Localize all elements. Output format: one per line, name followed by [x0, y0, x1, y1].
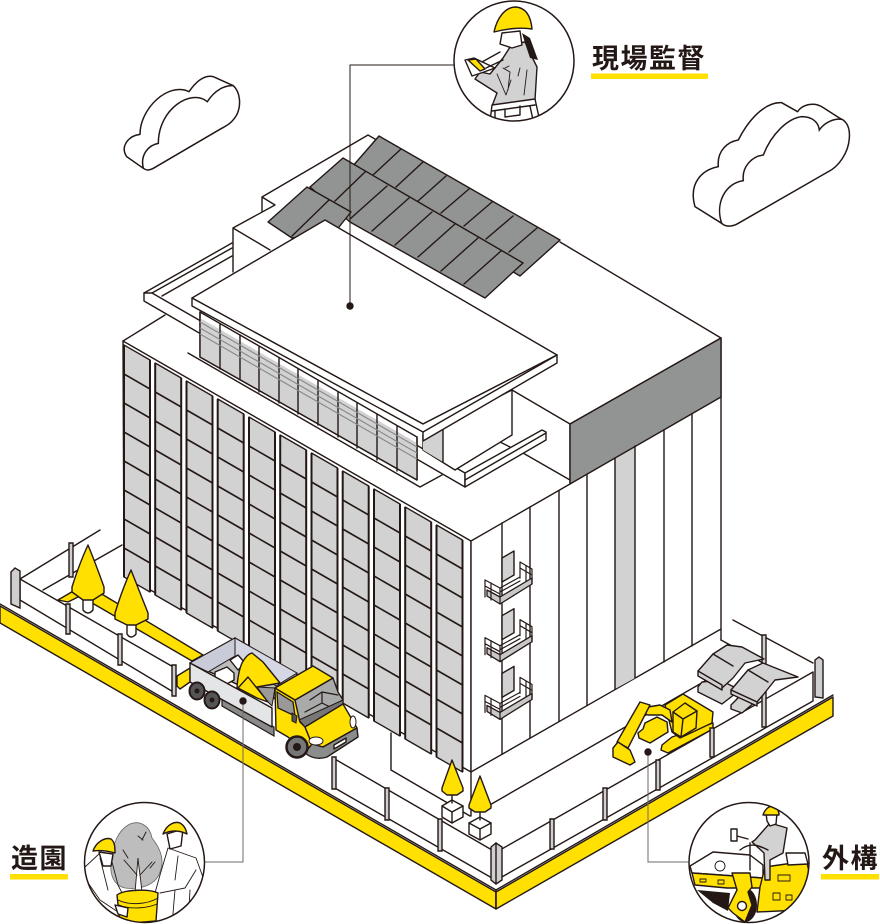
truck cab: [275, 688, 312, 752]
belt and trousers: [490, 98, 540, 116]
helmet: [494, 7, 532, 32]
portrait: site supervisor: [454, 1, 574, 122]
small tree and planter: left: [442, 760, 463, 823]
roller drum: [697, 890, 730, 911]
ground slab: [0, 604, 833, 909]
front fence: right section: [491, 635, 823, 884]
tree foliage: [111, 823, 162, 888]
truck chassis: [222, 698, 274, 736]
truck side window: [277, 692, 295, 716]
left worker: [85, 854, 122, 912]
front fork: [728, 873, 752, 922]
leader: supervisor: [346, 65, 453, 310]
truck cab roof: [275, 666, 333, 700]
truck bumper: [305, 728, 358, 758]
truck bed: [190, 638, 300, 706]
excavator crawler: [638, 717, 668, 743]
leader: exterior works: [644, 748, 688, 862]
forecourt lines: [391, 629, 745, 816]
front fence: left section: [11, 568, 176, 696]
tree: large right: [115, 570, 148, 637]
truck cab interior: [295, 678, 343, 722]
truck seats: [305, 692, 338, 718]
label: exterior works: 外構: [822, 844, 879, 874]
right worker: [155, 848, 202, 915]
truck headlights: [309, 716, 356, 745]
steering and mirror: [731, 829, 768, 870]
leader: landscaping: [205, 697, 247, 862]
tree: large left: [72, 545, 104, 613]
roller body yellow: [692, 873, 763, 888]
tree trunk: [135, 858, 142, 893]
roller hood: [690, 852, 763, 878]
excavator bucket: [613, 742, 635, 765]
portrait: landscaping: [84, 802, 204, 924]
truck front wheel: [286, 736, 308, 758]
building left facade: [123, 341, 471, 772]
excavator body: [665, 694, 713, 738]
tablet: [465, 58, 495, 76]
balconies: [485, 551, 532, 719]
ponytail: [522, 33, 538, 60]
drive wheel: [736, 890, 757, 922]
worker face: [766, 813, 777, 826]
left helmet: [93, 839, 115, 853]
face: [500, 31, 522, 48]
worker helmet: [763, 806, 779, 815]
rear fence: right: [721, 620, 813, 663]
building right facade: [471, 338, 721, 772]
jacket creases: [497, 66, 527, 95]
rear fence: left: [20, 530, 122, 590]
yellow planting strip: [58, 590, 203, 689]
worker body: [752, 823, 787, 880]
penthouse roof plate: [192, 220, 557, 441]
solar panels: [268, 136, 560, 298]
cloud: left: [124, 76, 240, 170]
excavator arm: [617, 702, 650, 748]
truck dash: [299, 700, 343, 727]
excavator boom: [643, 705, 672, 722]
jacket: [475, 42, 537, 106]
excavator tracks: [661, 723, 713, 753]
penthouse glazing: [200, 312, 417, 480]
portrait: exterior works: [689, 802, 811, 922]
rear body: [757, 863, 811, 912]
balustrade: [144, 243, 546, 487]
truck mirror: [292, 713, 297, 723]
truck rear wheels: [190, 682, 220, 708]
label: site supervisor: 現場監督: [592, 44, 706, 74]
cloud: right: [693, 103, 849, 226]
seat: [786, 853, 808, 865]
truck plate: [334, 738, 346, 749]
excavator cab: [673, 703, 697, 737]
building roof base: [123, 135, 721, 541]
truck: [190, 638, 358, 758]
truck side panel: [190, 663, 272, 727]
excavator: [613, 694, 713, 765]
small tree and planter: right: [469, 776, 491, 840]
penthouse wall: [423, 390, 512, 470]
concrete blocks: [698, 645, 798, 713]
left hand: [115, 905, 128, 917]
truck hood: [305, 704, 357, 747]
label: landscaping: 造園: [11, 844, 68, 874]
front fence: centre section: [332, 757, 492, 878]
truck dirt mound: [237, 653, 280, 702]
pot: [117, 890, 158, 924]
right helmet: [163, 822, 187, 834]
